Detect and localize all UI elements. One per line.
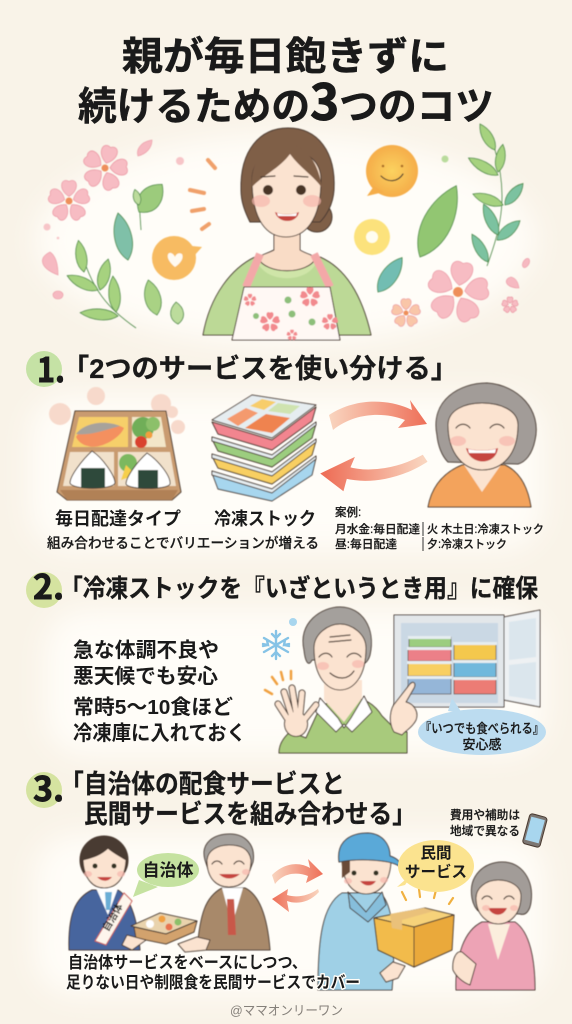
icon: snowflake xyxy=(263,618,297,659)
glow bubble xyxy=(354,219,390,255)
head xyxy=(342,858,391,894)
section 1 heading: 「2つのサービスを使い分ける」 xyxy=(62,354,458,384)
pink tub xyxy=(212,407,316,450)
older woman smiling xyxy=(428,383,536,507)
open freezer xyxy=(394,610,540,707)
title: 親が毎日飽きずに xyxy=(122,36,449,79)
caption: combine services: 自治体サービスをベースにしつつ、 xyxy=(68,952,307,972)
salad xyxy=(132,417,154,439)
green tub xyxy=(212,422,316,467)
arrow: to delivery xyxy=(272,859,323,884)
hair xyxy=(436,383,536,464)
callout: peace of mind: 『いつでも食べられる』 xyxy=(420,721,544,736)
fringe xyxy=(252,143,322,188)
body xyxy=(428,465,531,507)
features xyxy=(252,176,321,221)
hand xyxy=(453,952,476,985)
hero illustration: decorations xyxy=(42,122,531,328)
features xyxy=(450,424,515,462)
elder features xyxy=(212,861,250,878)
smiling sun speech bubble xyxy=(366,145,418,197)
icon: stacked freezer containers xyxy=(212,395,316,501)
arrow: from delivery xyxy=(272,889,319,912)
lemon and lettuce xyxy=(119,454,137,472)
staff shirt xyxy=(96,888,118,915)
section 3 heading: 民間サービスを組み合わせる」 xyxy=(84,799,416,829)
section 3 heading: 「自治体の配食サービスと xyxy=(60,769,345,799)
blue tub xyxy=(212,456,316,501)
section 3 heading xyxy=(26,762,416,829)
cap xyxy=(339,833,400,866)
hair xyxy=(342,858,350,878)
left hand xyxy=(278,688,316,737)
shirt xyxy=(488,924,510,960)
sprig right xyxy=(466,122,527,266)
yellow tub xyxy=(212,439,316,484)
delivery worker xyxy=(318,833,400,990)
door xyxy=(504,610,540,707)
staff sash xyxy=(95,893,132,945)
onigiri left xyxy=(70,451,115,488)
woman in apron xyxy=(203,128,371,340)
section 2 heading xyxy=(26,560,538,609)
small dots xyxy=(44,156,448,239)
onigiri right xyxy=(126,453,170,488)
cardboard box xyxy=(374,908,454,982)
hands xyxy=(122,935,146,950)
elder suit xyxy=(197,888,270,950)
right hand pointing xyxy=(390,682,417,735)
speech bubble: private service: サービス xyxy=(405,862,467,881)
section 1 heading: 1. xyxy=(37,343,65,392)
inner shirt and neck xyxy=(256,258,318,278)
section 1 heading xyxy=(26,343,458,392)
speech bubble: private service xyxy=(397,840,474,892)
icon: smartphone xyxy=(522,813,548,848)
section 3 heading: 3. xyxy=(33,762,64,811)
body xyxy=(203,257,371,335)
note: cost varies: 費用や補助は xyxy=(450,807,520,822)
staff features xyxy=(84,864,125,881)
labels: service types: 毎日配達タイプ xyxy=(55,509,181,529)
staff head xyxy=(80,836,128,884)
labels: service types: 冷凍ストック xyxy=(214,509,316,529)
containers xyxy=(408,637,496,694)
municipal staff and elder xyxy=(69,834,270,952)
text block: reassurance xyxy=(73,639,246,745)
face xyxy=(476,880,521,924)
older woman receiving xyxy=(453,862,535,990)
caption: combine services xyxy=(66,952,360,992)
worker hand xyxy=(380,962,405,982)
interior xyxy=(401,623,498,703)
apron xyxy=(232,254,340,340)
leaves xyxy=(110,178,469,325)
example schedule: 夕:冷凍ストック xyxy=(427,537,507,551)
section 2 heading: 2. xyxy=(33,560,64,609)
container lids xyxy=(407,636,497,680)
speech bubble: private service: 民間 xyxy=(420,844,452,862)
bun xyxy=(302,202,332,232)
section 2 heading: 「冷凍ストックを『いざというとき用』に確保 xyxy=(60,574,538,603)
text block: reassurance: 急な体調不良や xyxy=(73,639,219,662)
uniform xyxy=(318,893,394,990)
heart bubble xyxy=(152,236,202,280)
face xyxy=(314,624,366,690)
icon: bento box with steam xyxy=(49,387,185,500)
neck xyxy=(324,680,362,722)
lid with food xyxy=(212,395,316,438)
cardigan xyxy=(456,922,535,990)
features xyxy=(344,870,388,886)
meal tray xyxy=(131,913,197,934)
note: cost varies xyxy=(450,807,520,838)
hair xyxy=(303,607,371,664)
example schedule: 火 木土日:冷凍ストック xyxy=(427,522,544,536)
example schedule: 案例: xyxy=(335,506,361,519)
staff suit xyxy=(69,890,140,950)
example schedule xyxy=(335,506,544,551)
sprig left xyxy=(65,240,136,328)
callout: peace of mind: 安心感 xyxy=(462,737,502,752)
credit: @ママオンリーワン xyxy=(230,1003,343,1018)
frame xyxy=(394,615,504,707)
sweater and arms xyxy=(279,698,407,753)
rays xyxy=(402,889,453,904)
example schedule: 昼:毎日配達 xyxy=(335,537,398,551)
blossom centres xyxy=(66,164,463,316)
face xyxy=(252,150,321,237)
speech bubble: municipality: 自治体 xyxy=(142,860,194,880)
municipal staff and elder: 自治体 xyxy=(99,901,126,934)
salmon xyxy=(76,423,124,447)
text block: reassurance: 冷凍庫に入れておく xyxy=(73,722,246,745)
text block: reassurance: 常時5〜10食ほど xyxy=(73,696,234,719)
neck xyxy=(462,462,503,492)
callout: peace of mind xyxy=(418,698,546,755)
title: 続けるための3つのコツ xyxy=(78,63,494,135)
text block: reassurance: 悪天候でも安心 xyxy=(73,665,219,688)
features xyxy=(482,896,518,915)
arrow: to the right xyxy=(329,400,427,430)
arrow: to the left xyxy=(325,458,424,487)
face xyxy=(448,403,518,470)
cherry blossoms xyxy=(47,140,519,328)
features xyxy=(317,635,364,678)
elder shirt xyxy=(222,888,243,925)
collar xyxy=(348,892,386,922)
soft white panels xyxy=(30,135,545,995)
sparks xyxy=(265,671,291,694)
note: cost varies: 地域で異なる xyxy=(450,823,520,838)
hair xyxy=(471,862,531,914)
orange dashes xyxy=(190,160,215,229)
example schedule: 月水金:毎日配達 xyxy=(335,522,420,536)
caption: variation: 組み合わせることでバリエーションが増える xyxy=(47,535,319,551)
petals xyxy=(42,140,531,299)
speech bubble: municipality xyxy=(133,853,199,897)
labels: service types xyxy=(55,509,316,529)
hair back xyxy=(241,128,334,222)
older man waving xyxy=(265,607,417,753)
caption: combine services: 足りない日や制限食を民間サービスでカバー xyxy=(66,972,360,992)
collar xyxy=(316,696,372,732)
elder head xyxy=(204,834,253,875)
